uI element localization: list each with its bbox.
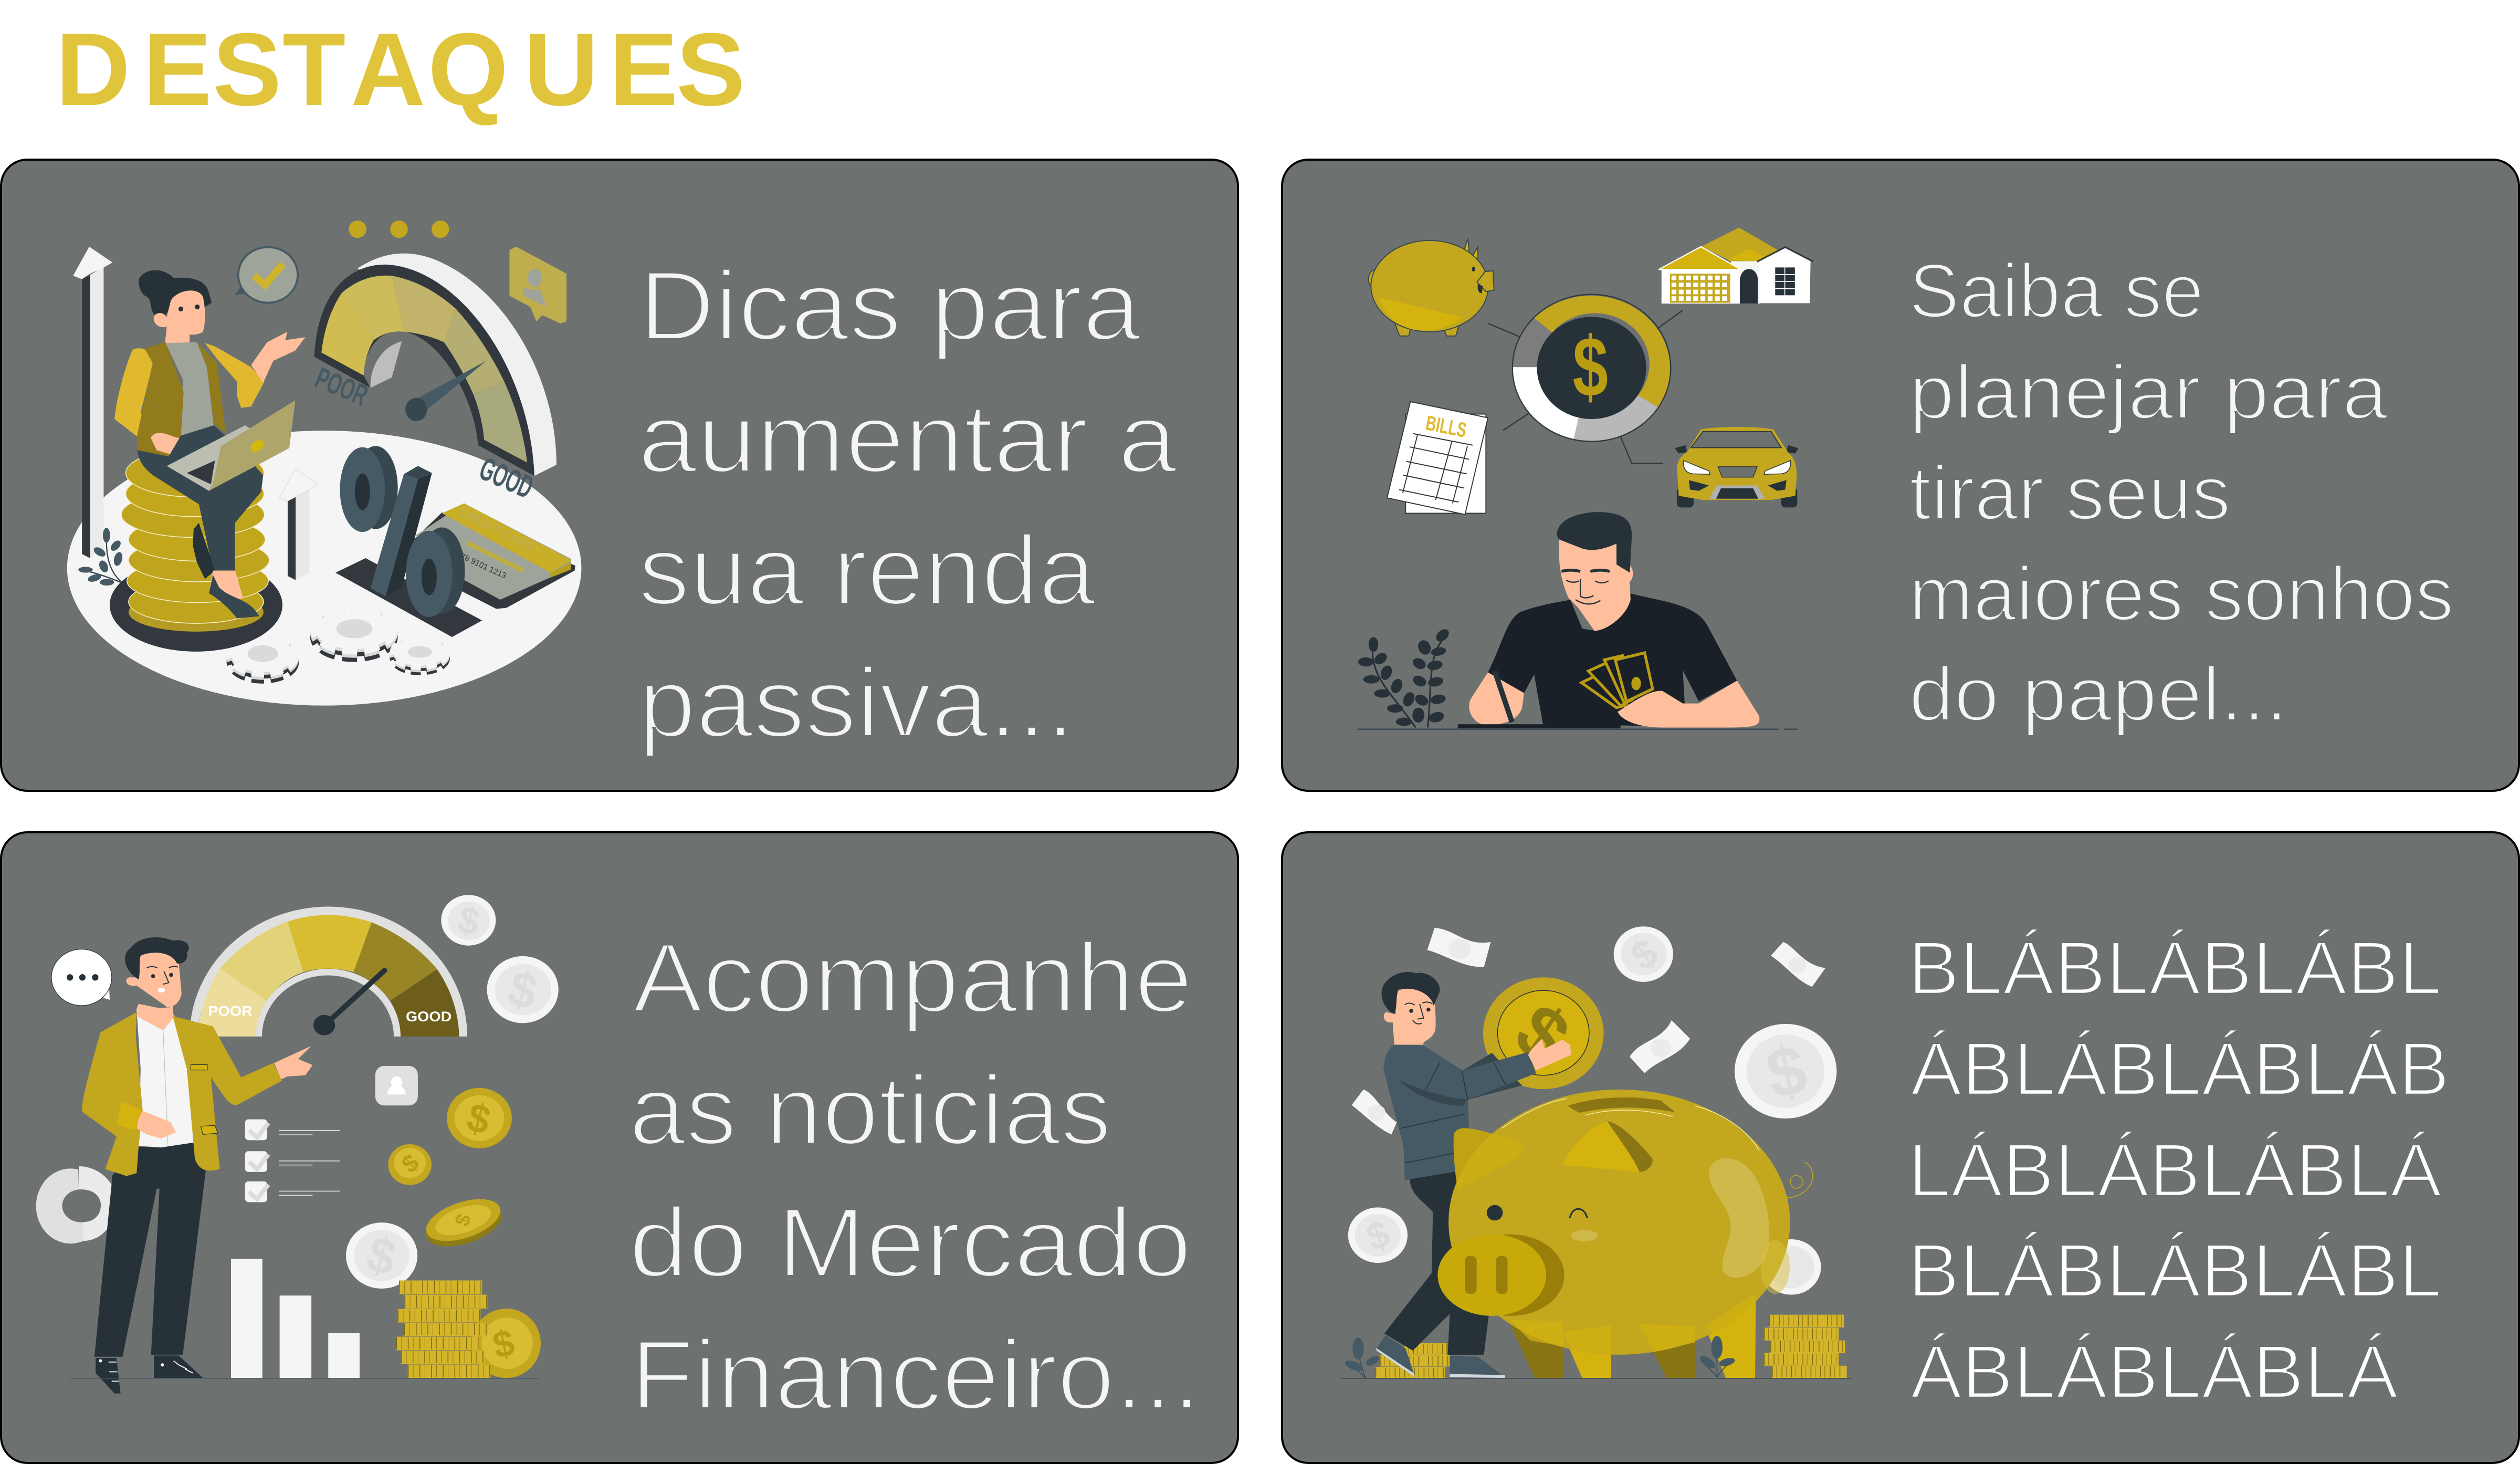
money fan <box>1581 653 1653 708</box>
text: panel heading: Acompanhe <box>633 923 1193 1033</box>
icon: gold coins: $ <box>463 1095 495 1144</box>
text: panel heading <box>638 250 1177 758</box>
icon: credit card: CREDIT CARD <box>457 505 538 555</box>
text: panel heading: ÁBLÁBLÁBLÁB <box>1910 1027 2450 1111</box>
hands and arms <box>1618 681 1759 728</box>
gauge: GOOD <box>475 450 538 506</box>
gauge: POOR <box>208 1003 253 1019</box>
icon: banknotes <box>1352 928 1825 1134</box>
text: panel heading: tirar seus <box>1909 450 2231 536</box>
feet and shoes <box>193 523 215 579</box>
shoes <box>96 1355 203 1394</box>
top <box>165 342 214 436</box>
icon: coin stacks <box>1376 1315 1847 1378</box>
donut chart with dollar: $ <box>1573 319 1608 414</box>
icon: tall arrow <box>73 247 112 558</box>
head <box>1384 988 1436 1044</box>
icon: profile tile <box>375 1066 418 1105</box>
sweater <box>1463 1053 1522 1100</box>
icon: bills document: BILLS <box>1424 412 1468 442</box>
laptop <box>167 425 281 491</box>
table line <box>1357 728 1798 730</box>
shirt <box>1488 593 1737 726</box>
connector lines <box>1488 310 1683 464</box>
highlight <box>1709 1158 1769 1278</box>
coin stack <box>121 449 269 632</box>
gauge <box>190 907 467 1037</box>
sleeves <box>114 348 155 444</box>
gauge <box>311 254 556 506</box>
man: $ <box>1500 986 1584 1082</box>
illustration: woman on coin stack with credit gauge <box>67 221 581 706</box>
icon: plant <box>78 528 124 585</box>
icon: credit card <box>414 504 575 609</box>
icon: car <box>1675 427 1799 507</box>
text: panel heading: LÁBLÁBLÁBLÁ <box>1908 1128 2442 1212</box>
platform ellipse <box>67 431 581 706</box>
icon: silver coins: $ <box>454 898 484 944</box>
text: panel heading <box>629 923 1201 1430</box>
icon: silver coins <box>346 895 559 1289</box>
trousers <box>94 1143 206 1357</box>
legs <box>1510 1324 1564 1378</box>
eyes and cheek <box>1487 1205 1503 1220</box>
icon: house <box>1658 227 1813 304</box>
woman <box>114 270 306 619</box>
icon: small arrow <box>279 469 318 580</box>
hair <box>1381 972 1440 1014</box>
man writing <box>1458 512 1759 728</box>
text: panel heading <box>1908 926 2450 1414</box>
icon: plants <box>1343 1336 1736 1378</box>
snout <box>1457 1235 1564 1316</box>
jacket <box>82 1012 143 1176</box>
panel: passive income <box>1 160 1238 791</box>
icon: credit card: 78 9101 1213 <box>459 552 508 581</box>
icon: silver coins: $ <box>361 1226 402 1287</box>
text: panel heading: do papel... <box>1909 651 2288 737</box>
hand <box>1528 1039 1571 1070</box>
trousers <box>138 425 263 571</box>
near ear <box>1561 1121 1653 1172</box>
panel background <box>1 160 1238 791</box>
icon: silver coins: $ <box>1361 1212 1395 1259</box>
icon: gold coins: $ <box>489 1322 518 1367</box>
shoes <box>1377 1335 1414 1375</box>
panel: planning <box>1282 160 2519 791</box>
icon: speech bubble <box>51 949 112 1006</box>
icon: profile chat card <box>509 247 566 323</box>
text: panel heading: Dicas para <box>639 250 1141 361</box>
panel: market news <box>1 832 1238 1463</box>
title: DESTAQUES <box>56 12 745 127</box>
text: panel heading: ÁBLÁBLÁBLÁ <box>1910 1330 2398 1414</box>
head <box>126 953 182 1030</box>
side ear overlay <box>1454 1128 1524 1190</box>
hair <box>125 937 189 979</box>
bar chart <box>231 1259 360 1378</box>
icon: check speech bubble <box>234 247 298 303</box>
icon: gold coins: $ <box>396 1148 424 1178</box>
text: panel heading: maiores sonhos <box>1909 551 2454 636</box>
panel background <box>1 832 1238 1463</box>
checklist <box>245 1120 340 1202</box>
gold coin held <box>1483 977 1604 1089</box>
text: panel heading: do Mercado <box>629 1187 1192 1298</box>
icon: plants <box>1358 627 1451 728</box>
vest <box>136 342 184 456</box>
percent sign <box>335 446 575 637</box>
icon: gold coins <box>388 1088 541 1378</box>
pig <box>1437 1090 1813 1378</box>
panel background <box>1282 832 2519 1463</box>
shirt <box>136 1009 194 1147</box>
icon: gears <box>232 610 446 678</box>
panel background <box>1282 160 2519 791</box>
illustration: man with piggy bank <box>1341 926 1852 1378</box>
icon: piggy bank <box>1369 238 1494 336</box>
panel: piggy bank <box>1282 832 2519 1463</box>
tail <box>1787 1163 1813 1198</box>
donut chart with dollar <box>1513 295 1671 442</box>
text: panel heading <box>1909 248 2454 737</box>
hair <box>1557 512 1632 573</box>
text: panel heading: Saiba se <box>1909 248 2204 333</box>
man <box>1376 972 1604 1378</box>
text: panel heading: BLÁBLÁBLÁBL <box>1908 1228 2442 1313</box>
gauge: POOR <box>311 361 372 412</box>
ground line <box>70 1378 539 1379</box>
hands <box>251 332 306 383</box>
body <box>1448 1090 1790 1355</box>
text: panel heading: BLÁBLÁBLÁBL <box>1908 926 2442 1010</box>
notebook <box>1458 724 1621 728</box>
icon: coin stack <box>396 1280 490 1378</box>
slot <box>1568 1097 1676 1113</box>
trousers <box>1384 1169 1494 1355</box>
icon: bills document <box>1387 402 1488 515</box>
man <box>82 937 312 1394</box>
hands <box>274 1046 312 1080</box>
neck and face <box>1559 539 1633 631</box>
leg overlays in body <box>1510 1293 1756 1354</box>
text: panel heading: sua renda <box>638 515 1096 625</box>
illustration: man pointing at gauge <box>36 895 559 1394</box>
text: panel heading: Financeiro... <box>631 1320 1201 1430</box>
icon: silver coins: $ <box>1760 1030 1813 1114</box>
gauge: GOOD <box>406 1009 452 1024</box>
far ear <box>1454 1128 1524 1189</box>
illustration: man planning budget <box>1357 227 1813 729</box>
dark base under coins <box>110 559 282 652</box>
hair bun <box>139 270 212 317</box>
face <box>154 290 205 350</box>
donut chart <box>36 1166 117 1243</box>
ground line <box>1341 1378 1852 1379</box>
icon: silver coins: $ <box>1623 930 1666 979</box>
icon: silver coins: $ <box>503 959 543 1020</box>
three dots <box>349 221 449 238</box>
icon: silver coins <box>1348 926 1836 1295</box>
text: panel heading: as noticias <box>629 1055 1111 1165</box>
text: panel heading: planejar para <box>1909 349 2388 435</box>
text: panel heading: passiva... <box>638 647 1075 758</box>
overlaid coin in glass <box>1761 1240 1790 1294</box>
text: panel heading: aumentar a <box>638 383 1177 493</box>
icon: gold coins: $ <box>451 1211 476 1229</box>
